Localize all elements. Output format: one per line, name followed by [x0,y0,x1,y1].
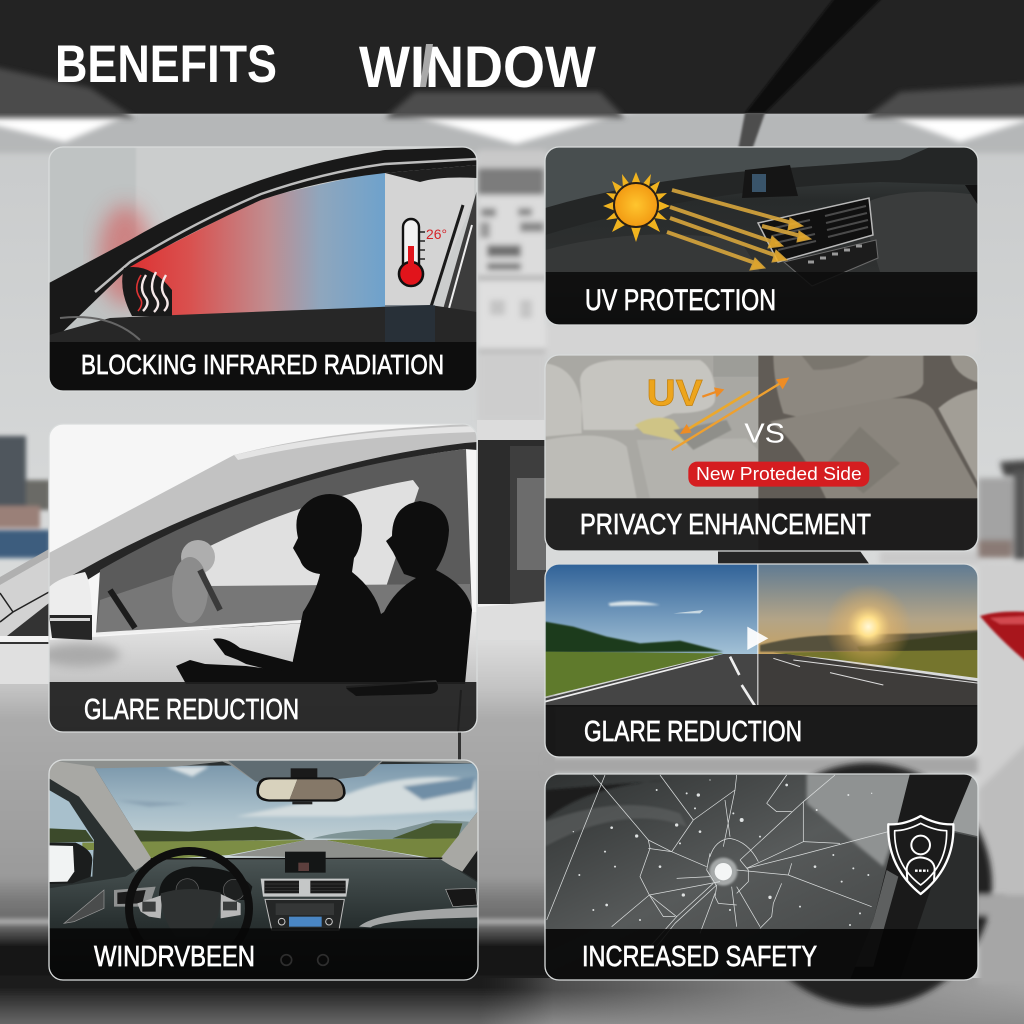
UV arrows [672,377,789,450]
instrument cluster [159,867,252,900]
side mirror [49,843,92,884]
caption: UV PROTECTION [585,284,776,317]
icon: sun [603,172,670,242]
side window [96,449,472,634]
right pillar [439,810,479,872]
door lower panel [49,305,477,391]
left door trim [64,890,104,923]
dashboard [50,859,478,908]
air vents [757,197,878,272]
caption: GLARE REDUCTION [584,716,802,748]
landscape [127,820,469,860]
caption: PRIVACY ENHANCEMENT [580,509,871,541]
panel: increased safety [545,773,980,982]
gap shadows [718,551,870,565]
VS label: VS [744,418,785,449]
impact point [709,858,737,886]
dash display [285,852,326,873]
panel: windshield view [49,760,479,980]
car hood [0,549,49,684]
panel borders [49,147,978,980]
headliner and visor [49,760,479,782]
window tint gradient [125,170,385,318]
caption: INCREASED SAFETY [582,941,817,973]
windshield sky [94,763,479,860]
ceiling lights [0,108,1024,144]
car body lower [0,640,555,1024]
panel: blocking infrared radiation [49,147,477,391]
dashboard screen [742,165,798,198]
header band [0,0,1024,118]
caption: BLOCKING INFRARED RADIATION [81,349,444,380]
icon: safety shield with person [888,816,953,894]
left pillar [49,760,152,872]
icon: thermometer with reading [399,219,447,286]
side mirror [50,572,92,640]
tail light [980,612,1024,665]
caption: GLARE REDUCTION [84,694,299,726]
steering wheel [129,851,249,966]
center console [261,879,349,930]
icon: thermometer with reading: 26° [426,226,447,242]
right trim and vent [359,907,479,927]
icon: people silhouettes [176,494,472,684]
caption: WINDRVBEEN [94,941,255,973]
badge: new protected side: New Proteded Side [696,463,862,484]
UV ray arrows [667,190,811,270]
panel: glare reduction road comparison [545,563,980,758]
panel: privacy enhancement [545,353,982,553]
UV label: UV [647,371,703,413]
title: WINDOW: WINDOW [359,35,596,100]
blurred wall detail [0,113,1024,422]
glass fragments [573,779,872,926]
rear wheel [744,763,1005,1007]
glass cracks [547,775,888,947]
rear-view mirror [256,768,346,804]
panel: glare reduction car silhouette [40,424,477,732]
door frame [49,147,477,345]
car door area [458,420,547,760]
roof and pillar [49,424,477,590]
icon: mirror with heat flames [122,267,172,316]
floor [478,978,1024,1024]
title: BENEFITS: BENEFITS [55,35,277,94]
panel: UV protection [545,147,978,325]
door body [50,612,476,682]
door handle [346,680,438,692]
left side glass [49,790,94,877]
car rear body [545,460,1024,985]
